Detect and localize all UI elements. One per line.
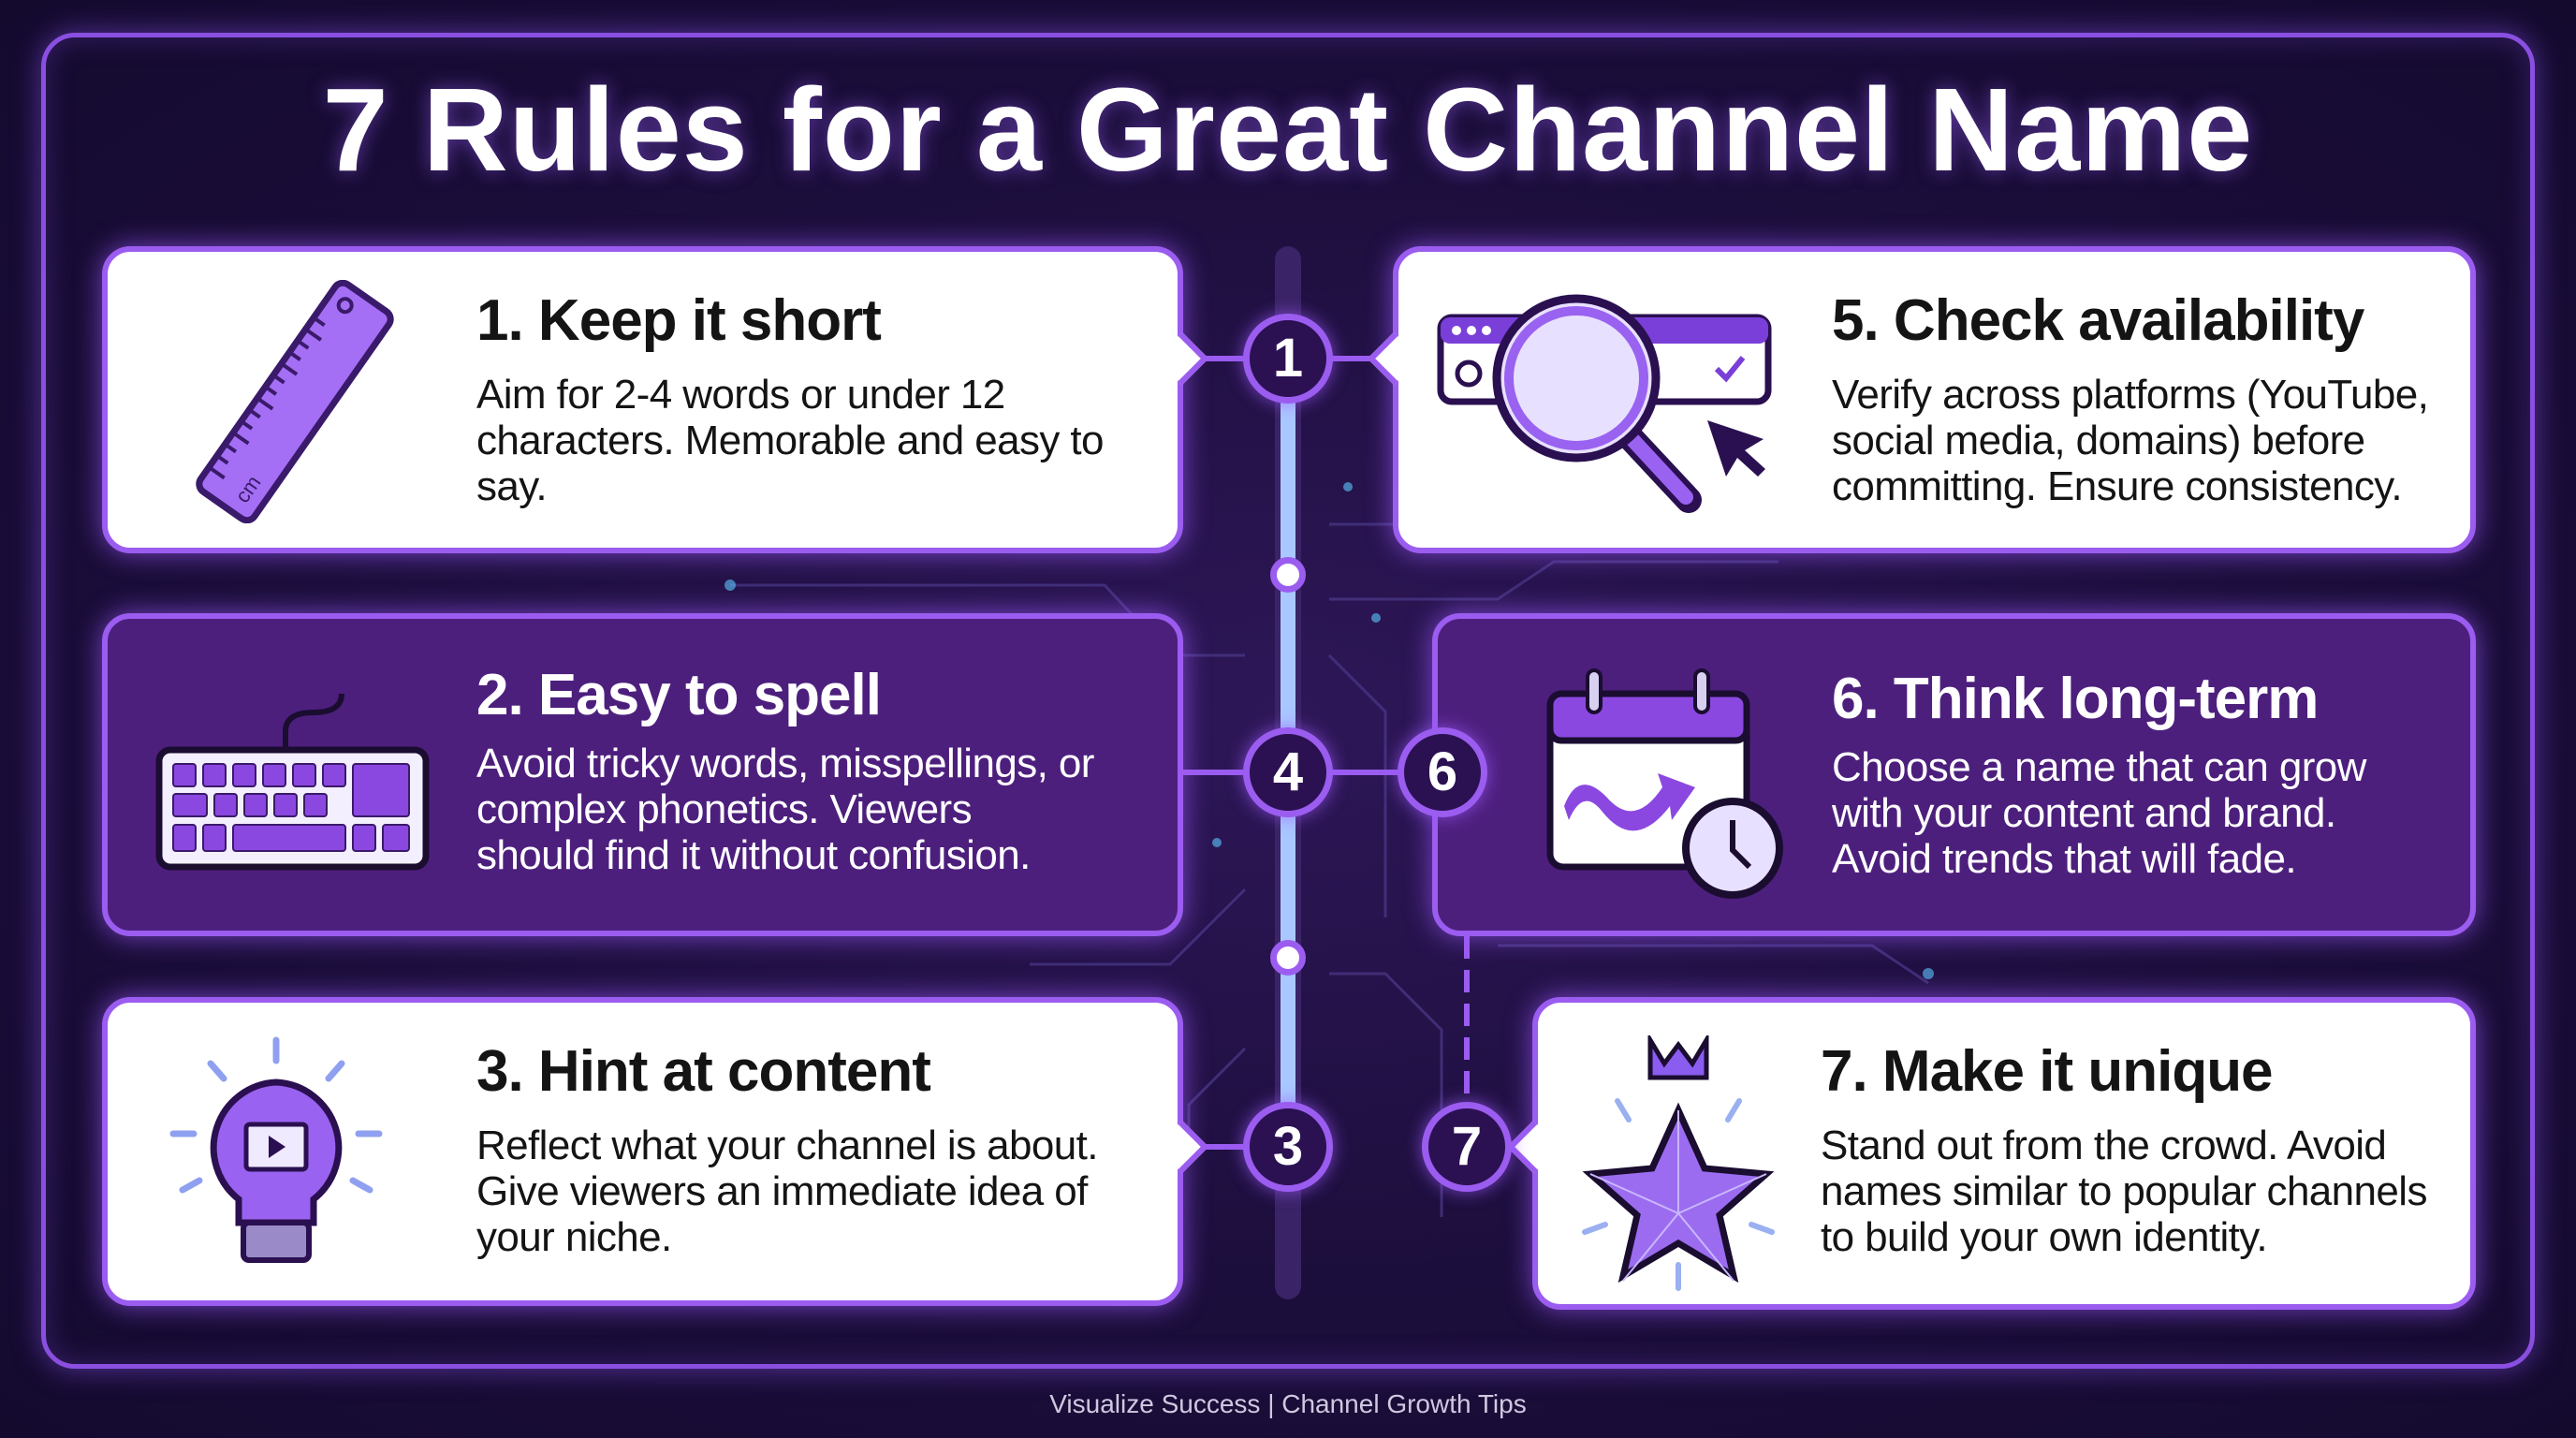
- body text: your niche.: [476, 1214, 672, 1260]
- panel 2: [102, 613, 1183, 936]
- notch 1: [1156, 332, 1208, 385]
- notch 3: [1156, 1121, 1208, 1173]
- number circle 6: 6: [1427, 741, 1457, 802]
- title: 7 Rules for a Great Channel Name: [323, 64, 2253, 196]
- icon: star with crown: [1582, 1035, 1775, 1291]
- icon: keyboard: [155, 694, 429, 871]
- body text: social media, domains) before: [1832, 418, 2365, 463]
- dot upper: [1270, 557, 1306, 593]
- notch 5: [1368, 332, 1420, 385]
- body text: Choose a name that can grow: [1832, 744, 2366, 790]
- body text: complex phonetics. Viewers: [476, 786, 972, 832]
- number circle 7: [1422, 1102, 1512, 1192]
- body text: Aim for 2-4 words or under 12: [476, 372, 1005, 418]
- panel 5: [1393, 246, 2476, 553]
- panel 6: [1432, 613, 2476, 936]
- body text: [1831, 744, 2366, 882]
- body text: Reflect what your channel is about.: [476, 1123, 1098, 1168]
- body text: [1832, 372, 2428, 509]
- body text: Avoid trends that will fade.: [1832, 836, 2296, 882]
- body text: say.: [476, 463, 547, 509]
- body text: [476, 1123, 1098, 1260]
- icon: ruler: cm: [230, 471, 265, 507]
- number circle 3: [1243, 1102, 1333, 1192]
- number circle 6: [1398, 727, 1487, 817]
- icon: calendar with clock: [1546, 668, 1783, 899]
- panel 1: [102, 246, 1183, 553]
- icon: light bulb: [170, 1037, 382, 1263]
- body text: Verify across platforms (YouTube,: [1832, 372, 2428, 418]
- heading: 3. Hint at content: [476, 1039, 930, 1104]
- number circle 4: [1243, 727, 1333, 817]
- dot lower: [1270, 940, 1306, 976]
- number circle 1: [1243, 314, 1333, 404]
- body text: characters. Memorable and easy to: [476, 418, 1104, 463]
- heading: 7. Make it unique: [1821, 1039, 2273, 1104]
- icon: magnifier browser: [1438, 294, 1771, 513]
- panel 3: [102, 997, 1183, 1306]
- number circle 3: 3: [1273, 1116, 1303, 1177]
- footer: Visualize Success | Channel Growth Tips: [1049, 1389, 1527, 1418]
- number circle 7: 7: [1452, 1116, 1482, 1177]
- heading: 5. Check availability: [1832, 288, 2364, 353]
- panel 7: [1532, 997, 2476, 1310]
- heading: 2. Easy to spell: [476, 663, 881, 727]
- body text: to build your own identity.: [1821, 1214, 2267, 1260]
- body text: [476, 372, 1104, 509]
- heading: 1. Keep it short: [476, 288, 881, 353]
- body text: Stand out from the crowd. Avoid: [1821, 1123, 2386, 1168]
- body text: should find it without confusion.: [476, 832, 1031, 878]
- body text: Avoid tricky words, misspellings, or: [476, 741, 1094, 786]
- number circle 1: 1: [1273, 328, 1303, 389]
- body text: with your content and brand.: [1832, 790, 2335, 836]
- icon: ruler: [196, 280, 394, 523]
- body text: committing. Ensure consistency.: [1832, 463, 2402, 509]
- notch 7: [1507, 1121, 1559, 1173]
- heading: 6. Think long-term: [1832, 667, 2318, 731]
- number circle 4: 4: [1273, 741, 1303, 802]
- body text: [1821, 1123, 2427, 1260]
- body text: [476, 741, 1094, 878]
- body text: Give viewers an immediate idea of: [476, 1168, 1088, 1214]
- body text: names similar to popular channels: [1821, 1168, 2427, 1214]
